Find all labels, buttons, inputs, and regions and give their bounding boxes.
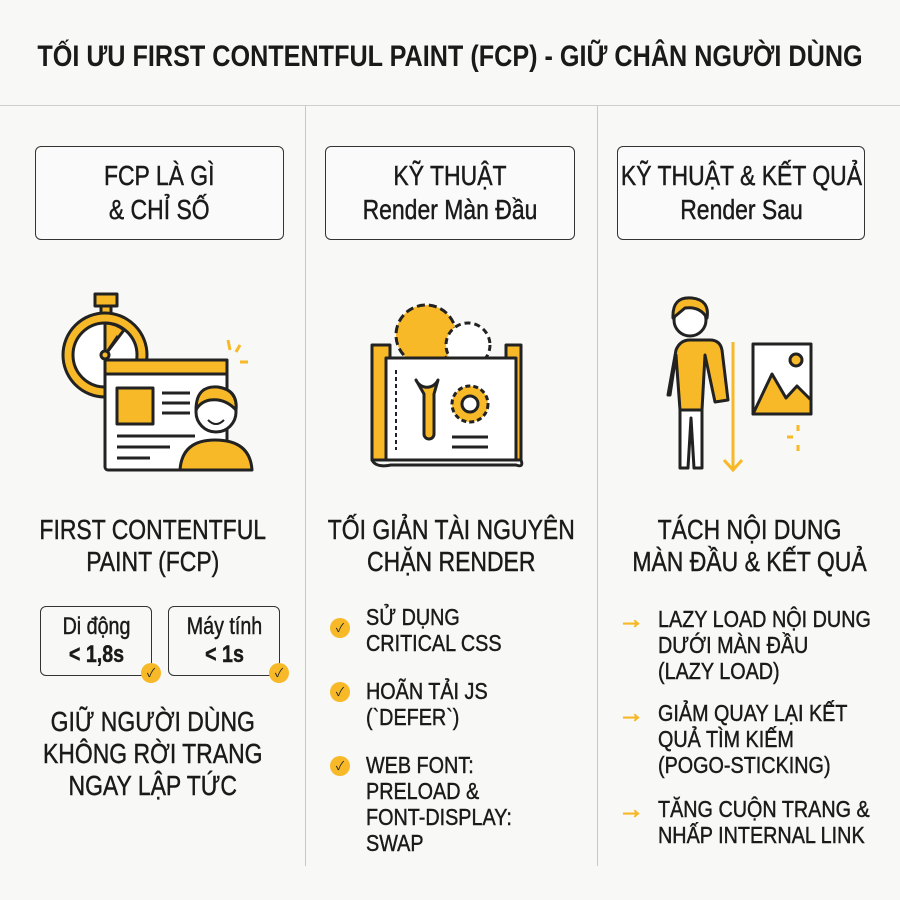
heading: separate content: MÀN ĐẦU & KẾT QUẢ — [632, 546, 866, 577]
metric: mobile: Di động — [62, 613, 130, 640]
heading box 1: & CHỈ SỐ — [109, 194, 210, 225]
list — [618, 604, 871, 848]
heading: first contentful paint: PAINT (FCP) — [86, 546, 219, 577]
item: lazy load — [618, 604, 871, 684]
item: web font — [330, 752, 512, 856]
item: pogo sticking: GIẢM QUAY LẠI KẾT — [658, 700, 847, 726]
item: defer js: ✓ — [336, 685, 344, 699]
item: web font: WEB FONT: — [366, 752, 474, 778]
metric: mobile: < 1,8s — [68, 641, 124, 668]
heading box 3: Render Sau — [680, 194, 802, 225]
icon: blueprint gears — [370, 304, 524, 468]
item: pogo sticking: → — [618, 698, 644, 728]
item: defer js: HOÃN TẢI JS — [366, 678, 488, 704]
item: lazy load: LAZY LOAD NỘI DUNG — [658, 606, 871, 632]
panel: FCP là gì — [35, 146, 289, 801]
icon: stopwatch and browser — [62, 292, 254, 472]
item: scroll internal link: NHẤP INTERNAL LINK — [658, 822, 865, 848]
heading box 1 — [35, 146, 284, 240]
item: pogo sticking — [618, 698, 848, 778]
item: scroll internal link — [618, 794, 870, 848]
heading box 3: KỸ THUẬT & KẾT QUẢ — [620, 160, 862, 191]
heading box 1: FCP LÀ GÌ — [104, 160, 215, 191]
metric: desktop: < 1s — [205, 641, 243, 668]
title: TỐI ƯU FIRST CONTENTFUL PAINT (FCP) - GIỮ CHÂN NGƯỜI DÙNG — [37, 40, 863, 73]
item: web font: SWAP — [366, 830, 424, 856]
heading box 3 — [617, 146, 865, 240]
text: keep users: NGAY LẬP TỨC — [68, 770, 237, 801]
item: critical css: SỬ DỤNG — [366, 604, 460, 630]
panel: render màn đầu — [325, 146, 575, 856]
metric: desktop: ✓ — [275, 666, 283, 680]
item: lazy load: (LAZY LOAD) — [658, 658, 780, 684]
icon: person, arrow, image — [666, 296, 812, 472]
text: keep users: GIỮ NGƯỜI DÙNG — [50, 706, 255, 737]
heading: separate content: TÁCH NỘI DUNG — [657, 514, 841, 545]
heading box 2: KỸ THUẬT — [393, 160, 507, 191]
panel: render sau — [617, 146, 871, 848]
item: web font: ✓ — [336, 759, 344, 773]
metric: desktop — [168, 606, 280, 676]
heading: minimize blocking resources: CHẶN RENDER — [367, 546, 536, 577]
item: defer js — [330, 678, 488, 730]
checklist — [330, 604, 512, 856]
heading: separate content — [632, 514, 867, 577]
item: lazy load: → — [618, 604, 644, 634]
text: keep users: KHÔNG RỜI TRANG — [43, 738, 262, 769]
heading: first contentful paint — [39, 514, 266, 578]
heading: minimize blocking resources: TỐI GIẢN TÀI NGUYÊN — [328, 514, 575, 545]
heading box 2: Render Màn Đầu — [363, 194, 537, 225]
item: pogo sticking: (POGO-STICKING) — [658, 752, 831, 778]
item: scroll internal link: → — [618, 794, 644, 824]
heading: first contentful paint: FIRST CONTENTFUL — [39, 514, 266, 545]
item: pogo sticking: QUẢ TÌM KIẾM — [658, 726, 794, 752]
text: keep users — [43, 706, 262, 801]
item: critical css: ✓ — [336, 621, 344, 635]
metric: mobile — [40, 606, 152, 676]
item: lazy load: DƯỚI MÀN ĐẦU — [658, 632, 808, 658]
item: web font: PRELOAD & — [366, 778, 479, 804]
heading: minimize blocking resources — [328, 514, 575, 577]
item: web font: FONT-DISPLAY: — [366, 804, 512, 830]
metric: mobile: ✓ — [147, 666, 155, 680]
item: critical css — [330, 604, 502, 656]
item: defer js: (`DEFER`) — [366, 704, 459, 730]
item: scroll internal link: TĂNG CUỘN TRANG & — [658, 796, 870, 822]
metric: desktop: Máy tính — [186, 613, 262, 640]
item: critical css: CRITICAL CSS — [366, 630, 502, 656]
heading box 2 — [325, 146, 575, 240]
